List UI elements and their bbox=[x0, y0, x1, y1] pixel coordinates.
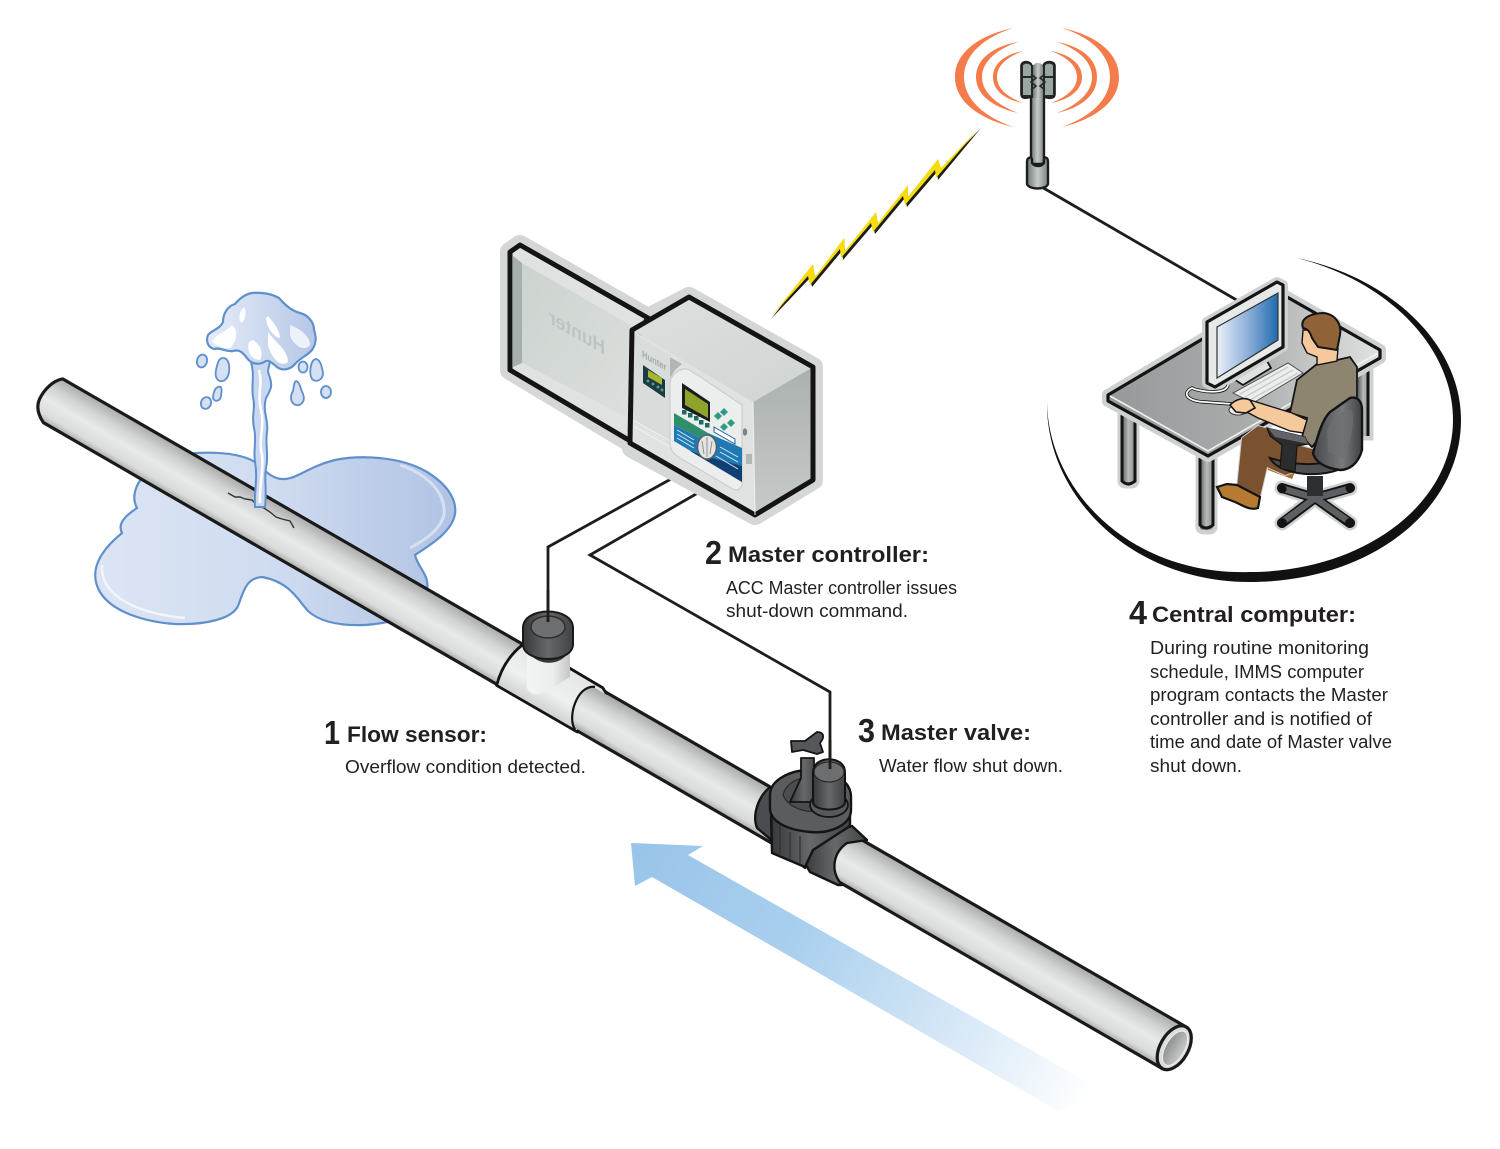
monitor screen bbox=[1217, 293, 1278, 378]
water droplets bbox=[195, 353, 331, 410]
green and blue label panels bbox=[674, 413, 708, 437]
control buttons bbox=[682, 410, 710, 428]
label 4: central computer: schedule, IMMS computer bbox=[1150, 662, 1364, 682]
label 3: master valve bbox=[858, 712, 1063, 776]
hand bbox=[1230, 399, 1255, 413]
water main pipe bbox=[30, 373, 1198, 1076]
wire: tower to computer bbox=[1040, 186, 1240, 302]
label 3: master valve: Water flow shut down. bbox=[879, 756, 1063, 776]
valve body bbox=[771, 800, 850, 867]
neck and face bbox=[1302, 330, 1338, 365]
flow control handle bbox=[791, 732, 823, 754]
label 3: master valve: Master valve: bbox=[881, 720, 1031, 745]
shoe bbox=[1217, 484, 1260, 509]
valve inlet coupling bbox=[755, 787, 815, 868]
water puddle bbox=[95, 453, 455, 625]
mouse cable bbox=[1187, 385, 1232, 404]
pipe crack bbox=[228, 493, 294, 528]
trousers bbox=[1237, 426, 1338, 497]
water geyser bbox=[195, 293, 331, 507]
flow sensor collar bbox=[527, 640, 570, 663]
wireless computer station swoosh bbox=[1047, 258, 1461, 582]
tower bbox=[955, 28, 1119, 188]
office chair bbox=[1267, 398, 1362, 528]
hair bbox=[1302, 313, 1340, 350]
label 1: flow sensor: Overflow condition detected. bbox=[345, 757, 586, 777]
label 4: central computer: Central computer: bbox=[1152, 602, 1356, 627]
controller faceplate bbox=[670, 369, 742, 490]
recess shadow bbox=[670, 357, 682, 378]
label 3: master valve: 3 bbox=[858, 712, 875, 749]
label 4: central computer: 4 bbox=[1129, 594, 1148, 631]
tower base bbox=[1027, 158, 1048, 188]
label 2: master controller bbox=[705, 534, 957, 621]
master valve bbox=[755, 732, 867, 885]
label 2: master controller: shut-down command. bbox=[726, 601, 908, 621]
tee fitting body bbox=[494, 639, 627, 746]
programming dial bbox=[698, 435, 716, 459]
label 2: master controller: 2 bbox=[705, 534, 722, 571]
chair seat bbox=[1270, 450, 1360, 474]
cabinet right side bbox=[753, 367, 813, 515]
keyboard bbox=[1233, 363, 1303, 403]
tower antenna head bbox=[1021, 62, 1055, 98]
label 4: central computer: time and date of Master valve bbox=[1150, 732, 1392, 752]
controller halo bbox=[510, 245, 813, 515]
water stem bbox=[251, 360, 271, 507]
shirt bbox=[1290, 357, 1357, 447]
chair base bbox=[1282, 488, 1350, 523]
master controller bbox=[510, 245, 813, 515]
computer workstation bbox=[1108, 282, 1380, 530]
solenoid collar bbox=[810, 793, 848, 817]
label 1: flow sensor: 1 bbox=[324, 714, 340, 751]
label 2: master controller: ACC Master controller issues bbox=[726, 578, 957, 598]
lightning bolt: wireless link bbox=[771, 127, 981, 319]
arm bbox=[1243, 400, 1307, 433]
flow direction arrow bbox=[631, 843, 1105, 1112]
label 4: central computer: controller and is notified of bbox=[1150, 709, 1373, 729]
tee branch bbox=[527, 650, 570, 694]
rear shoe bbox=[1267, 458, 1295, 479]
small keypad module bbox=[643, 365, 665, 398]
tower mast bbox=[1031, 92, 1044, 164]
valve outlet coupling bbox=[803, 826, 867, 885]
cabinet front bbox=[630, 330, 755, 515]
valve bonnet bbox=[770, 770, 851, 832]
desk top bbox=[1108, 293, 1380, 456]
water burst bbox=[207, 293, 316, 369]
label 4: central computer: shut down. bbox=[1150, 756, 1242, 776]
label 4: central computer: During routine monitoring bbox=[1150, 638, 1369, 658]
cabinet latch and hinge bbox=[743, 428, 747, 436]
label 1: flow sensor bbox=[324, 714, 586, 777]
label 4: central computer: program contacts the Master bbox=[1150, 685, 1388, 705]
wires: controller to sensor and valve bbox=[548, 474, 830, 768]
cabinet door bbox=[510, 245, 648, 442]
solenoid bbox=[813, 759, 845, 810]
label 4: central computer bbox=[1129, 594, 1392, 776]
armrest bbox=[1267, 428, 1308, 472]
cabinet door: Hunter bbox=[549, 306, 605, 360]
LCD display bbox=[682, 383, 710, 422]
direction pad bbox=[714, 408, 735, 431]
flow control stem bbox=[790, 758, 818, 802]
chair back bbox=[1313, 398, 1362, 470]
monitor bbox=[1207, 282, 1283, 387]
monitor stand bbox=[1232, 361, 1271, 385]
mouse bbox=[1229, 405, 1247, 415]
tee fitting and flow sensor bbox=[494, 590, 627, 746]
person bbox=[1217, 313, 1357, 509]
signal waves bbox=[955, 28, 1119, 127]
flow sensor cap bbox=[523, 612, 573, 659]
desk legs bbox=[1122, 358, 1369, 530]
label 1: flow sensor: Flow sensor: bbox=[347, 722, 487, 747]
cabinet top bbox=[632, 297, 813, 402]
logo on panel: Hunter bbox=[642, 349, 666, 374]
chair column bbox=[1307, 476, 1323, 496]
label 2: master controller: Master controller: bbox=[728, 542, 929, 567]
